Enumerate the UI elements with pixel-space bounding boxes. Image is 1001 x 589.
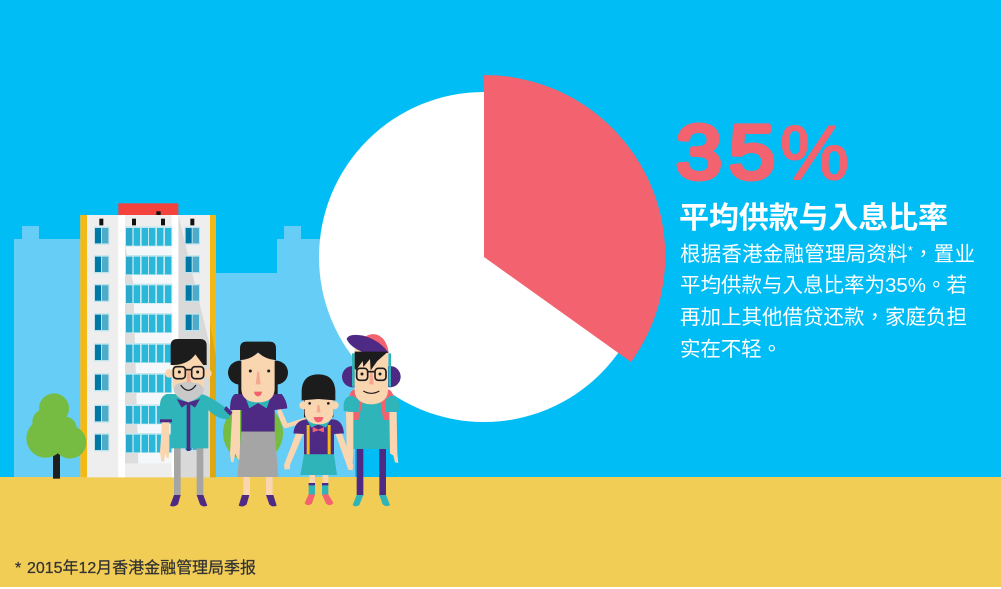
backpack straps xyxy=(349,389,363,420)
tree behind woman xyxy=(223,403,283,463)
body text: 实在不轻。 xyxy=(680,338,782,361)
grandfather xyxy=(160,339,233,506)
ground xyxy=(0,477,1001,587)
pie chart xyxy=(319,75,665,422)
footnote: * xyxy=(15,560,21,577)
big number: 35% xyxy=(676,110,849,196)
family illustration xyxy=(160,334,401,506)
big number: 35%: % xyxy=(780,111,849,196)
body text: ，置业 xyxy=(913,243,975,266)
body text: 平均供款与入息比率为35%。若 xyxy=(680,274,967,297)
big number: 35%: 5 xyxy=(729,110,775,196)
heading: 平均供款与入息比率 xyxy=(679,202,948,235)
body text: 再加上其他借贷还款，家庭负担 xyxy=(680,306,967,329)
body text: 根据香港金融管理局资料 xyxy=(680,243,908,266)
apartment building xyxy=(80,203,216,477)
tree xyxy=(26,393,86,479)
mother xyxy=(228,342,306,506)
background skyline xyxy=(14,226,355,479)
son xyxy=(342,334,401,506)
big number: 35%: 3 xyxy=(676,110,722,196)
footnote: 2015年12月香港金融管理局季报 xyxy=(27,558,256,577)
daughter xyxy=(284,374,353,505)
body text xyxy=(680,243,975,361)
pie slice: 35% xyxy=(484,75,665,362)
body text: * xyxy=(908,243,913,258)
